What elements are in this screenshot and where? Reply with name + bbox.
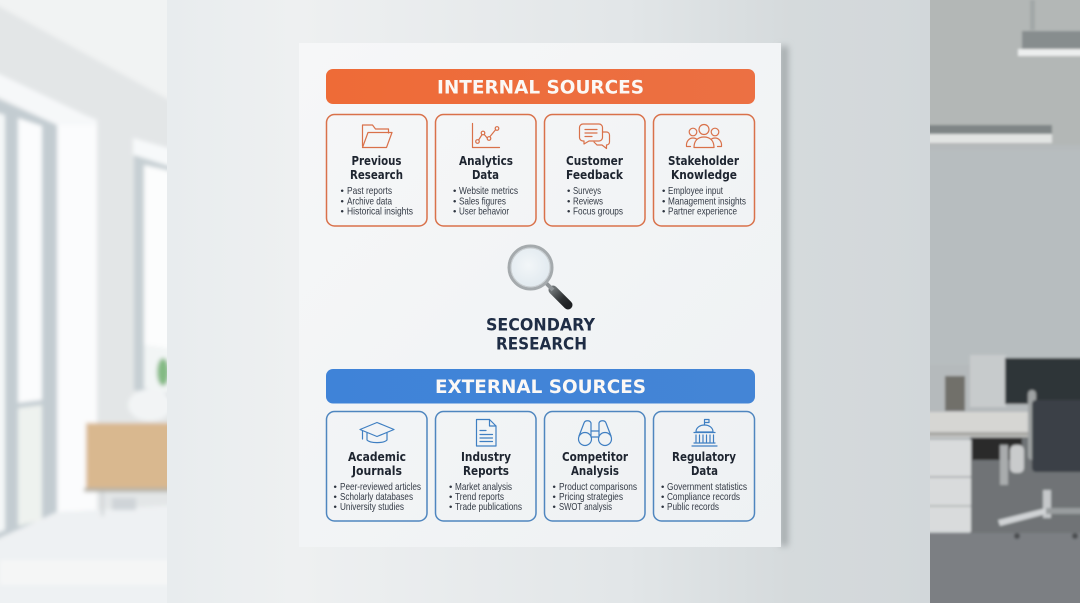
card: regulatory data bbox=[654, 412, 754, 521]
icon: people bbox=[686, 124, 722, 148]
card: competitor analysis: Competitor bbox=[562, 449, 629, 464]
card: stakeholder knowledge: Knowledge bbox=[671, 167, 737, 182]
bullet list bbox=[567, 186, 623, 218]
bullet list: • bbox=[662, 196, 665, 208]
icon: binoculars bbox=[578, 421, 612, 446]
bullet list: Reviews bbox=[573, 196, 603, 208]
bullet list: • bbox=[662, 186, 665, 197]
bullet list: • bbox=[453, 196, 456, 208]
bullet list: • bbox=[552, 502, 556, 513]
bullet list: • bbox=[334, 482, 337, 493]
card: academic journals: Academic bbox=[348, 449, 406, 464]
title: secondary research bbox=[486, 316, 596, 354]
background: blurred grey office on the right bbox=[925, 0, 1080, 603]
card: customer feedback: Feedback bbox=[566, 167, 624, 182]
bullet list: Trend reports bbox=[455, 492, 504, 503]
card: previous research: Previous bbox=[352, 153, 402, 168]
card: industry reports: Reports bbox=[463, 463, 509, 478]
bullet list: • bbox=[661, 492, 664, 503]
card: regulatory data: Regulatory bbox=[672, 449, 736, 464]
bullet list bbox=[334, 482, 421, 513]
bullet list: Compliance records bbox=[667, 492, 740, 503]
card: previous research bbox=[326, 114, 427, 226]
bullet list: Past reports bbox=[347, 186, 392, 197]
wall behind the poster bbox=[167, 0, 930, 603]
bullet list bbox=[661, 482, 747, 513]
card: analytics data: Analytics bbox=[459, 153, 513, 168]
bullet list: • bbox=[449, 482, 452, 493]
banner: internal sources: INTERNAL SOURCES bbox=[437, 76, 644, 98]
bullet list: • bbox=[340, 206, 344, 218]
bullet list: • bbox=[334, 492, 337, 503]
bullet list: SWOT analysis bbox=[559, 502, 612, 513]
card: previous research: Research bbox=[350, 167, 403, 182]
card: competitor analysis: Analysis bbox=[571, 463, 619, 478]
card: customer feedback: Customer bbox=[566, 153, 624, 168]
background: blurred bright office on the left bbox=[0, 0, 176, 603]
bullet list bbox=[552, 482, 637, 513]
title: secondary research: SECONDARY bbox=[486, 316, 596, 334]
bullet list: Historical insights bbox=[347, 206, 413, 218]
bullet list: • bbox=[661, 502, 664, 513]
icon: government building bbox=[692, 420, 717, 446]
card: customer feedback bbox=[544, 114, 645, 226]
bullet list: Focus groups bbox=[573, 206, 623, 218]
bullet list: • bbox=[453, 186, 456, 197]
bullet list bbox=[340, 186, 413, 218]
poster board bbox=[299, 43, 781, 547]
icon: folder bbox=[362, 125, 392, 148]
bullet list: • bbox=[552, 482, 556, 493]
bullet list: Government statistics bbox=[667, 482, 747, 493]
bullet list: User behavior bbox=[459, 206, 509, 218]
icon: magnifying glass bbox=[509, 246, 568, 305]
card: analytics data: Data bbox=[472, 167, 499, 182]
bullet list: Sales figures bbox=[459, 196, 506, 208]
bullet list: • bbox=[567, 186, 570, 197]
bullet list bbox=[453, 186, 518, 218]
poster shadow bbox=[780, 46, 788, 546]
title: secondary research: RESEARCH bbox=[496, 334, 587, 354]
bullet list: Product comparisons bbox=[559, 482, 637, 493]
icon: document bbox=[476, 420, 496, 446]
bullet list bbox=[449, 482, 522, 513]
bullet list: • bbox=[661, 482, 664, 493]
card: regulatory data: Data bbox=[691, 463, 718, 478]
bullet list: Partner experience bbox=[668, 206, 737, 218]
card: industry reports bbox=[436, 412, 536, 521]
bullet list: Scholarly databases bbox=[340, 492, 413, 503]
bullet list: Employee input bbox=[668, 186, 723, 197]
bullet list: Trade publications bbox=[455, 502, 522, 513]
bullet list: • bbox=[552, 492, 556, 503]
bullet list: Surveys bbox=[573, 186, 601, 197]
bullet list: • bbox=[662, 206, 665, 218]
bullet list: Website metrics bbox=[459, 186, 518, 197]
bullet list: Peer-reviewed articles bbox=[340, 482, 421, 493]
icon: line chart bbox=[472, 124, 500, 148]
card: stakeholder knowledge: Stakeholder bbox=[668, 153, 740, 168]
icon: speech bubbles bbox=[580, 124, 610, 148]
bullet list: • bbox=[449, 492, 452, 503]
card: academic journals: Journals bbox=[351, 463, 402, 478]
icon: graduation cap bbox=[360, 422, 394, 443]
bullet list: Public records bbox=[667, 502, 719, 513]
bullet list: Market analysis bbox=[455, 482, 512, 493]
bullet list: University studies bbox=[340, 502, 404, 513]
bullet list: Pricing strategies bbox=[559, 492, 623, 503]
banner: external sources bbox=[326, 369, 755, 404]
bullet list: • bbox=[334, 502, 337, 513]
banner: internal sources bbox=[326, 69, 755, 104]
bullet list: • bbox=[449, 502, 452, 513]
card: competitor analysis bbox=[544, 412, 645, 521]
card: analytics data bbox=[436, 114, 536, 226]
bullet list: • bbox=[567, 196, 570, 208]
bullet list: • bbox=[453, 206, 456, 218]
bullet list bbox=[662, 186, 746, 218]
bullet list: • bbox=[340, 196, 344, 208]
bullet list: Management insights bbox=[668, 196, 746, 208]
card: stakeholder knowledge bbox=[654, 114, 754, 226]
bullet list: • bbox=[340, 186, 344, 197]
bullet list: Archive data bbox=[347, 196, 392, 208]
banner: external sources: EXTERNAL SOURCES bbox=[435, 376, 646, 398]
card: academic journals bbox=[326, 412, 427, 521]
bullet list: • bbox=[567, 206, 570, 218]
card: industry reports: Industry bbox=[461, 449, 511, 464]
